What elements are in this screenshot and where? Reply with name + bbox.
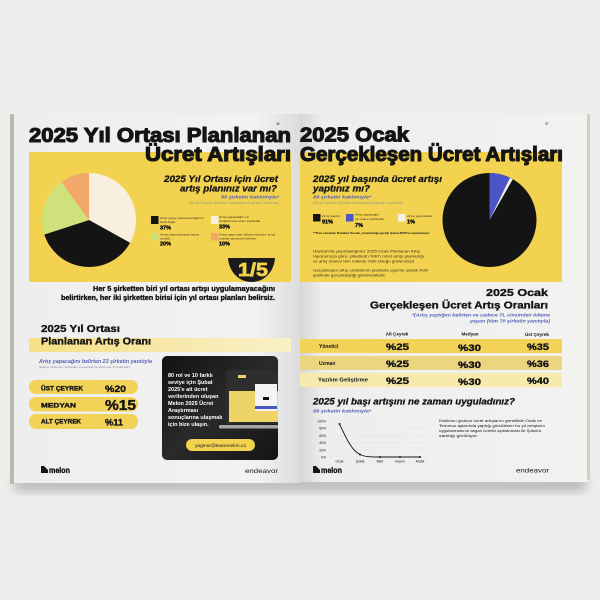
title left [29,125,291,166]
chart commentary: uygulanmasının asgari ücretin açıklanması ile Şubat'a [439,429,541,433]
title left: Ücret Artışları [145,143,291,166]
row: Uzman: %25 [386,359,410,370]
row: Yazılım Geliştirme: Yazılım Geliştirme [318,378,368,384]
endeavor logo left: endeavor [245,469,278,475]
percentile rows: MEDYAN [41,402,76,410]
melon logo left [41,466,70,475]
left page [10,114,300,484]
line chart: 0% [321,456,326,460]
salary table: Medyan [461,332,479,336]
section heading left: Planlanan Artış Oranı [41,336,151,348]
legend left: Artış yapacağız ve [219,215,249,219]
row: Uzman: Uzman [319,361,335,367]
badge 1/5: 1/5 [238,260,268,280]
respondents note left: Artış yapacağını belirten 23 şirketin yanıtıyla [38,359,152,365]
percentile rows: %11 [105,418,124,428]
question right: 2025 yıl başında ücret artışı [312,174,442,185]
row: Uzman: %30 [458,360,481,371]
legend right: Artış yapmadık. [407,214,433,218]
respondents note right [412,312,551,324]
body text right: ve artış oranını tüm rollerde %30 olduğu gözlenmişti. [313,260,415,264]
dark contact card [162,356,278,460]
right page [300,114,590,482]
legend right: 7% [355,223,364,229]
line chart: 100% [317,420,326,424]
body text right: raporumuza göre, şirketlerin %90'ı ücret artışı planladığı [313,254,424,258]
yellow panel right [300,152,562,282]
question right: 89 şirketin katılımıyla* [313,194,372,200]
legend left: Artış yapmayı düşünüyoruz ama [219,232,275,236]
yellow panel left [29,152,291,282]
row: Yazılım Geliştirme [300,373,562,388]
row: Yönetici: %30 [458,343,481,354]
question right: yaptınız mı? [312,184,370,194]
footnote right: **Tüm cevaplar Rekabet Kurulu yönetmeliği gereği Şubat 2025'te toplanmıştır. [313,231,430,235]
legend left: 33% [219,224,231,230]
highlight band [29,338,291,352]
chart heading: 2025 yıl başı artışını ne zaman uyguladınız? [312,396,515,408]
legend left: 10% [219,242,231,248]
legend right: 91% [322,220,334,226]
summary text left: belirtirken, her iki şirketten birisi için yıl ortası planları belirsiz. [61,295,275,302]
summary text left [61,286,275,302]
legend right [313,212,433,229]
pie chart right [442,173,536,267]
respondents note left [38,359,152,369]
laptop mockup [219,370,278,428]
salary table: Alt Çeyrek [386,332,409,336]
question right: (Ekosi Ödeyen Şirketler Hesaplama Dışında Tutulanlar) [313,201,403,205]
title right: Gerçekleşen Ücret Artışları [300,143,563,166]
question left: 2025 Yıl Ortası için ücret [163,174,279,185]
legend left: oranlar tamamen belirsiz. [219,236,257,240]
line chart: Ocak [336,460,344,464]
melon logo right [313,466,342,475]
percentile rows [29,380,138,429]
chart heading: 89 şirketin katılımıyla* [313,408,372,414]
legend left: Artış yapıp yapmayacağımız [160,216,205,220]
chart commentary: sarktığı görülüyor. [439,434,478,438]
legend left: artışlarımıza oranı belirledik. [219,219,261,223]
row: Yönetici [300,339,562,354]
row: Yönetici: %35 [527,342,550,353]
legend left: belli değil. [160,220,176,224]
respondents note right: yapan (tüm 70 şirketin yanıtıyla) [469,318,551,324]
section heading right [370,287,548,312]
respondents note left: (Ekosi Ödeyen Şirketler Hesaplama Dışında Tutulanlar) [39,365,130,369]
row: Yönetici: Yönetici [319,344,339,350]
percentile rows: %20 [105,384,126,395]
body text right: Gerçekleşen artış oranlarının planlarla uyumlu olarak %30 [313,268,428,272]
row: Yazılım Geliştirme: %40 [527,376,549,387]
section heading left [41,323,151,348]
question left: (Ekosi Ödeyen Şirketler Hesaplama Dışında Tutulanlar) [189,201,279,205]
title right [300,124,563,166]
line chart: 20% [319,448,326,452]
row: Yönetici: %25 [386,342,410,353]
melon logo right: melon [321,466,342,475]
chart commentary: Katılımcı grubun ücret artışlarını genellikle Ocak ve [439,419,542,423]
body text right: Haziran'da yayımladığımız 2025 Ocak Planlanan Artış [313,250,420,254]
line chart: 40% [319,441,326,445]
question left: artış planınız var mı? [180,184,277,194]
respondents note right: *(Artış yaptığını belirten ve sadece TL cinsinden ödeme [412,312,550,318]
legend right: ve oranı belirledik. [355,217,385,221]
row: Uzman [300,356,562,371]
card text: seviye için Şubat [168,380,213,386]
line chart: Aralık [416,460,425,464]
magazine shadow [14,476,586,492]
title left: 2025 Yıl Ortası Planlanan [29,125,291,147]
section heading left: 2025 Yıl Ortası [41,323,120,335]
card text: Melon 2025 Ücret [168,400,213,407]
legend left: Artış yapmamaya karar [160,232,199,236]
card text [168,373,223,428]
card text: 80 rol ve 10 farklı [168,373,213,379]
card text: verilerinden oluşan [168,394,219,400]
legend left: 37% [160,226,172,232]
section heading right: 2025 Ocak [486,287,548,299]
chart heading [312,396,515,414]
melon logo left: melon [49,466,70,475]
email button: yagmur@teammelon.co [195,443,246,449]
pie chart left [42,173,136,267]
salary table: Üst Çeyrek [525,331,549,337]
percentile rows: %15 [105,398,136,414]
row: Yazılım Geliştirme: %25 [386,376,410,387]
line chart: Kasım [395,460,405,464]
section heading right: Gerçekleşen Ücret Artış Oranları [370,298,548,312]
card text: 2025'e ait ücret [168,387,208,393]
body text right [313,250,428,278]
title right: 2025 Ocak [300,124,410,146]
row: Uzman: %36 [527,359,549,370]
legend left [151,215,275,248]
line chart: Mart [377,460,383,464]
chart commentary: Temmuz aylarında yaptığı görülürken bu yıl artışların [439,424,545,428]
legend right: 1% [407,220,416,226]
legend left: verdik. [160,236,171,240]
card text: sonuçlarına ulaşmak [168,415,223,421]
question right [312,174,442,205]
card text: Araştırması [168,408,199,414]
percentile rows: ÜST ÇEYREK [41,384,83,392]
summary text left: Her 5 şirketten biri yıl ortası artışı uygulamayacağını [93,286,275,293]
line chart [317,420,430,464]
row: Yazılım Geliştirme: %30 [458,377,481,388]
body text right: şeklinde gerçekleştiği görülmektedir. [313,274,386,278]
endeavor logo right: endeavor [516,468,549,474]
line chart: 80% [319,426,326,430]
line chart: Şubat [356,460,364,464]
line chart: 60% [319,434,326,438]
page number right: 37 [545,122,549,126]
legend left: 20% [160,242,172,248]
salary table [300,331,562,388]
chart commentary [439,419,545,438]
question left: 80 şirketin katılımıyla* [221,194,280,200]
badge 1/5 [228,258,275,282]
legend right: Artış yapacağız [355,212,380,216]
percentile rows: ALT ÇEYREK [41,418,81,426]
question left [163,174,280,205]
legend right: Artış yaptık. [322,214,341,218]
page number left: 36 [276,122,280,126]
card text: için bize ulaşın. [168,422,209,428]
